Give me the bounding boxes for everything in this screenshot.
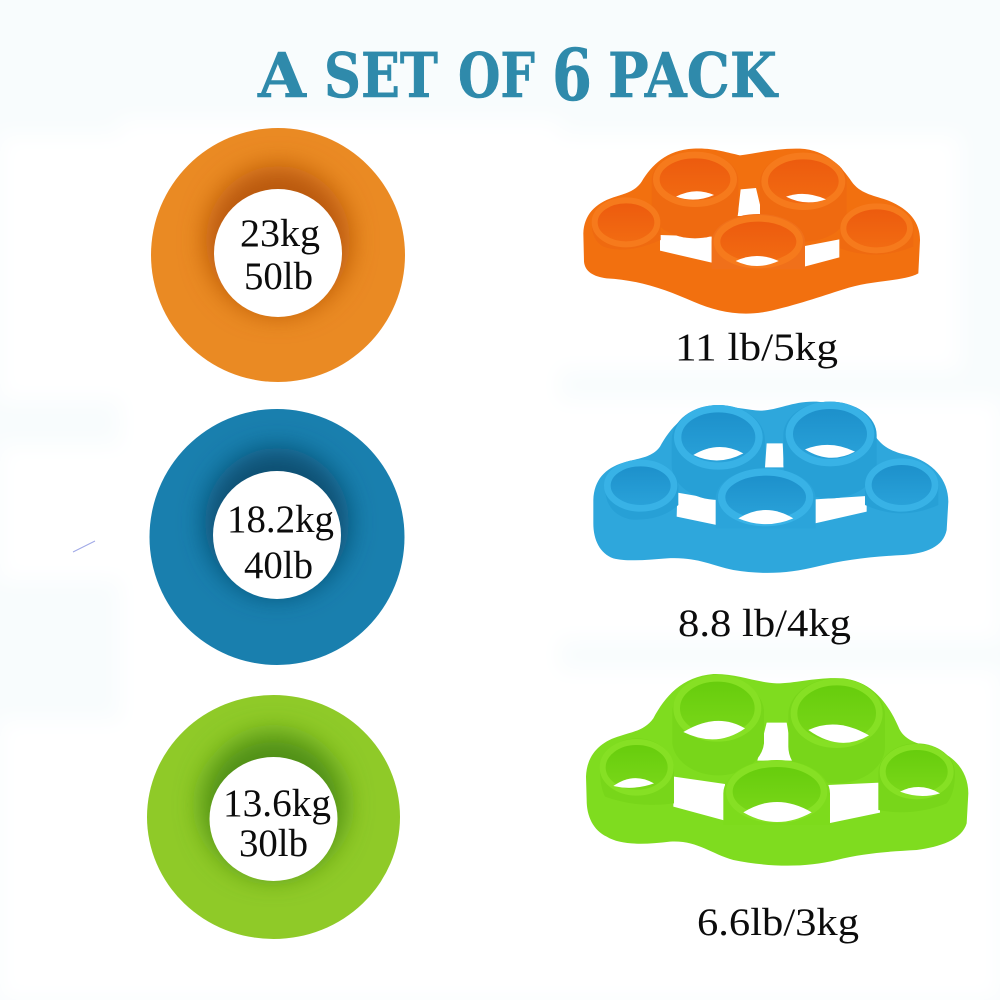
green grip ring 13.6kg 30lb: 30lb	[239, 822, 308, 865]
orange grip ring 23kg 50lb	[151, 128, 405, 382]
orange band label: 11 lb/5kg	[675, 326, 838, 369]
title	[257, 33, 779, 117]
orange grip ring 23kg 50lb: 23kg	[240, 212, 320, 255]
orange finger band	[583, 149, 920, 314]
title: SET	[324, 39, 438, 112]
green band label: 6.6lb/3kg	[697, 901, 859, 944]
blue finger band	[593, 402, 948, 573]
blue grip ring 18.2kg 40lb	[150, 409, 404, 665]
green grip ring 13.6kg 30lb: 13.6kg	[223, 782, 331, 825]
title: PACK	[608, 39, 779, 112]
green grip ring 13.6kg 30lb	[147, 695, 400, 939]
title: A	[257, 39, 307, 112]
title: 6	[552, 33, 592, 117]
green finger band	[586, 674, 968, 866]
blue band label: 8.8 lb/4kg	[678, 602, 851, 645]
title: OF	[458, 39, 535, 112]
blue grip ring 18.2kg 40lb: 40lb	[244, 544, 313, 587]
orange grip ring 23kg 50lb: 50lb	[244, 255, 313, 298]
blue grip ring 18.2kg 40lb: 18.2kg	[227, 498, 334, 541]
